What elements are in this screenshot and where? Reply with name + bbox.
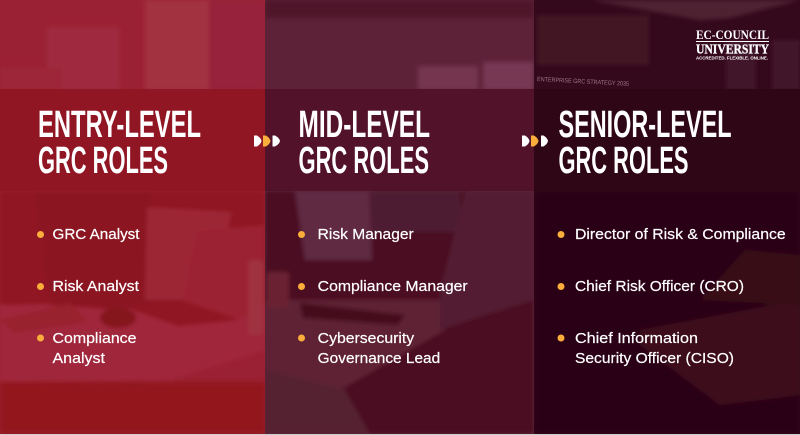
panel: senior-level xyxy=(534,0,800,434)
arrow: entry to mid xyxy=(254,136,280,146)
logo: EC-Council University: EC-COUNCIL xyxy=(696,28,769,42)
list: mid-level roles: Cybersecurity xyxy=(318,331,415,347)
list: entry-level roles: Risk Analyst xyxy=(52,279,139,295)
logo: EC-Council University: ACCREDITED. FLEXIBLE. ONLINE. xyxy=(696,56,768,62)
title band xyxy=(723,89,800,93)
list: mid-level roles: Risk Manager xyxy=(318,227,414,243)
heading: entry-level: GRC ROLES xyxy=(38,140,168,182)
list: entry-level roles: Analyst xyxy=(52,351,105,367)
panel: entry-level xyxy=(0,0,265,434)
list: mid-level roles: Governance Lead xyxy=(318,351,440,367)
heading: mid-level: MID-LEVEL xyxy=(298,104,430,146)
heading: entry-level xyxy=(38,104,201,182)
heading: senior-level xyxy=(558,104,732,182)
list: senior-level roles xyxy=(558,227,786,367)
title band xyxy=(0,89,265,191)
heading: entry-level: ENTRY-LEVEL xyxy=(38,104,201,146)
list: entry-level roles xyxy=(37,227,140,367)
list: senior-level roles: Chief Information xyxy=(575,331,698,347)
list: entry-level roles: GRC Analyst xyxy=(52,227,140,243)
list: entry-level roles: Compliance xyxy=(52,331,136,347)
logo: EC-Council University: UNIVERSITY xyxy=(696,42,769,56)
list: senior-level roles: Director of Risk & Compliance xyxy=(575,227,786,243)
heading: senior-level: GRC ROLES xyxy=(558,140,688,182)
list: mid-level roles: Compliance Manager xyxy=(318,279,468,295)
list: mid-level roles xyxy=(298,227,468,367)
arrow: mid to senior xyxy=(522,136,548,146)
list: senior-level roles: Security Officer (CISO) xyxy=(575,351,734,367)
heading: mid-level: GRC ROLES xyxy=(298,140,429,182)
list: senior-level roles: Chief Risk Officer (CRO) xyxy=(575,279,744,295)
logo: EC-Council University xyxy=(696,28,769,62)
title band xyxy=(265,89,534,191)
panel: mid-level xyxy=(265,0,534,434)
heading: mid-level xyxy=(298,104,430,182)
panel: senior-level: ENTERPRISE GRC STRATEGY 2035 xyxy=(537,76,630,88)
